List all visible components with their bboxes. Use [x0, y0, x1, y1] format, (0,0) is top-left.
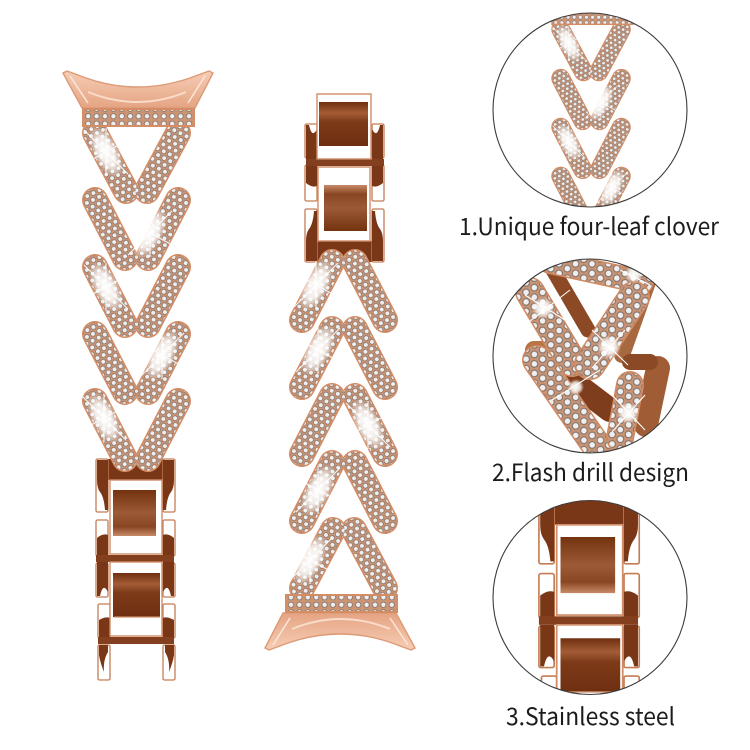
- triangular rhinestone link: [285, 530, 398, 613]
- sparkle highlights: [78, 121, 188, 449]
- rhinestone chevron 4: [95, 401, 178, 459]
- triangular rhinestone link: [82, 108, 195, 191]
- rhinestone chevron 2: [95, 267, 178, 325]
- rhinestone chevron 3: [302, 329, 385, 387]
- upper metal links: [305, 124, 384, 262]
- detail circle 2: rhinestone close-up: [493, 259, 687, 453]
- detail circle 1: chevron links: [493, 11, 687, 219]
- rhinestone chevron 4: [302, 262, 385, 320]
- rhinestone chevron 3: [95, 334, 178, 392]
- caption 3: 3.Stainless steel: [506, 697, 675, 732]
- last metal link: [98, 562, 175, 680]
- rhinestone chevron 2: [302, 396, 385, 454]
- sparkles: [525, 265, 650, 432]
- caption 2: 2.Flash drill design: [492, 453, 689, 488]
- bottom connector: [265, 613, 415, 650]
- caption 1: 1.Unique four-leaf clover: [459, 207, 720, 242]
- rhinestone chevron 1: [302, 463, 385, 521]
- rhinestone chevron 1: [95, 200, 178, 258]
- top metal link frame: [317, 94, 371, 159]
- watch band: front view: [63, 71, 213, 680]
- watch band: reversed view: [265, 94, 415, 650]
- top connector: [63, 71, 213, 108]
- detail circle 3: stainless steel links: [492, 500, 688, 695]
- sparkle highlights: [284, 254, 394, 591]
- lower metal links: [96, 459, 175, 597]
